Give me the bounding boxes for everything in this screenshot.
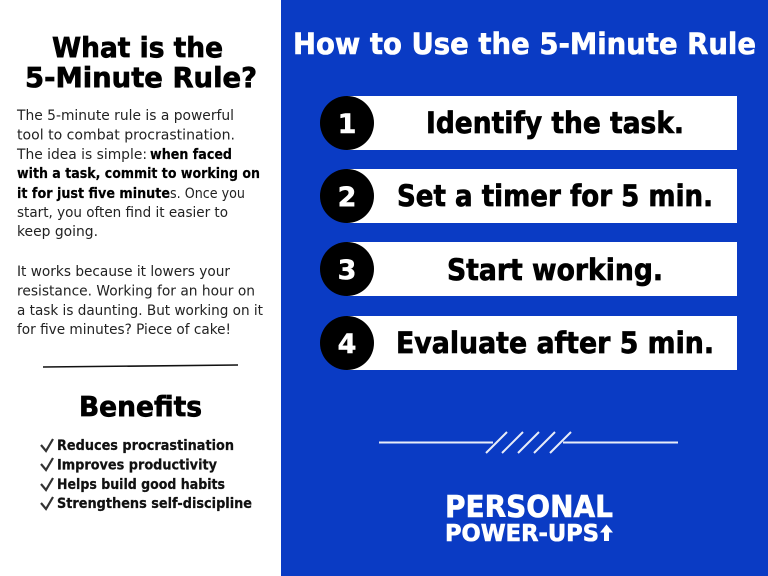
- logo: Personal Power-Ups: POWER-UPS: [445, 521, 599, 547]
- text block: explanation: keep going.: [17, 224, 98, 240]
- text block: explanation: resistance. Working for an hour on: [17, 284, 255, 300]
- logo: Personal Power-Ups: [445, 490, 613, 547]
- step 2: Set a timer for 5 min.: [397, 179, 713, 213]
- icon: up arrow: [600, 524, 613, 541]
- step 3: Start working.: [447, 253, 663, 287]
- text block: explanation: with a task, commit to working on: [17, 166, 260, 182]
- heading: What is the 5-Minute Rule: [25, 31, 257, 94]
- heading: What is the 5-Minute Rule: What is the: [52, 31, 223, 64]
- step 4: 4: [338, 329, 356, 360]
- step 1: Identify the task.: [426, 106, 684, 140]
- benefit item: good habits: Helps build good habits: [57, 477, 225, 493]
- step 4: [320, 316, 737, 370]
- panel: left background: [0, 0, 281, 576]
- panel: right blue background: [281, 0, 768, 576]
- text block: explanation: a task is daunting. But working on it: [17, 303, 263, 319]
- text block: explanation: s. Once you: [170, 186, 245, 202]
- benefit item: improves productivity: Improves productivity: [57, 458, 217, 474]
- heading: Benefits: Benefits: [79, 390, 202, 423]
- benefit item: self-discipline: Strengthens self-discipline: [57, 496, 252, 512]
- heading: What is the 5-Minute Rule: 5-Minute Rule?: [25, 61, 257, 94]
- step 2: [320, 169, 737, 223]
- benefit item: reduces procrastination: Reduces procrastination: [57, 438, 234, 454]
- step 3: [320, 242, 737, 296]
- text block: explanation: [16, 108, 263, 338]
- step 4: Evaluate after 5 min.: [396, 326, 714, 360]
- text block: explanation: start, you often find it easier to: [17, 205, 228, 221]
- text block: explanation: It works because it lowers your: [17, 264, 230, 280]
- step 1: 1: [338, 109, 356, 140]
- text block: explanation: The idea is simple:: [16, 147, 147, 163]
- step 1: [320, 96, 737, 150]
- text block: explanation: tool to combat procrastination.: [17, 128, 235, 144]
- step 3: 3: [338, 255, 356, 286]
- text block: explanation: when faced: [150, 147, 232, 163]
- logo: Personal Power-Ups: PERSONAL: [445, 490, 613, 525]
- heading: How to Use the 5-Minute Rule: How to Use the 5-Minute Rule: [293, 27, 756, 61]
- text block: explanation: for five minutes? Piece of cake!: [17, 322, 231, 338]
- step 2: 2: [338, 182, 356, 213]
- text block: explanation: it for just five minute: [17, 186, 170, 202]
- text block: explanation: The 5-minute rule is a powerful: [16, 108, 234, 124]
- list: benefits: [41, 438, 252, 512]
